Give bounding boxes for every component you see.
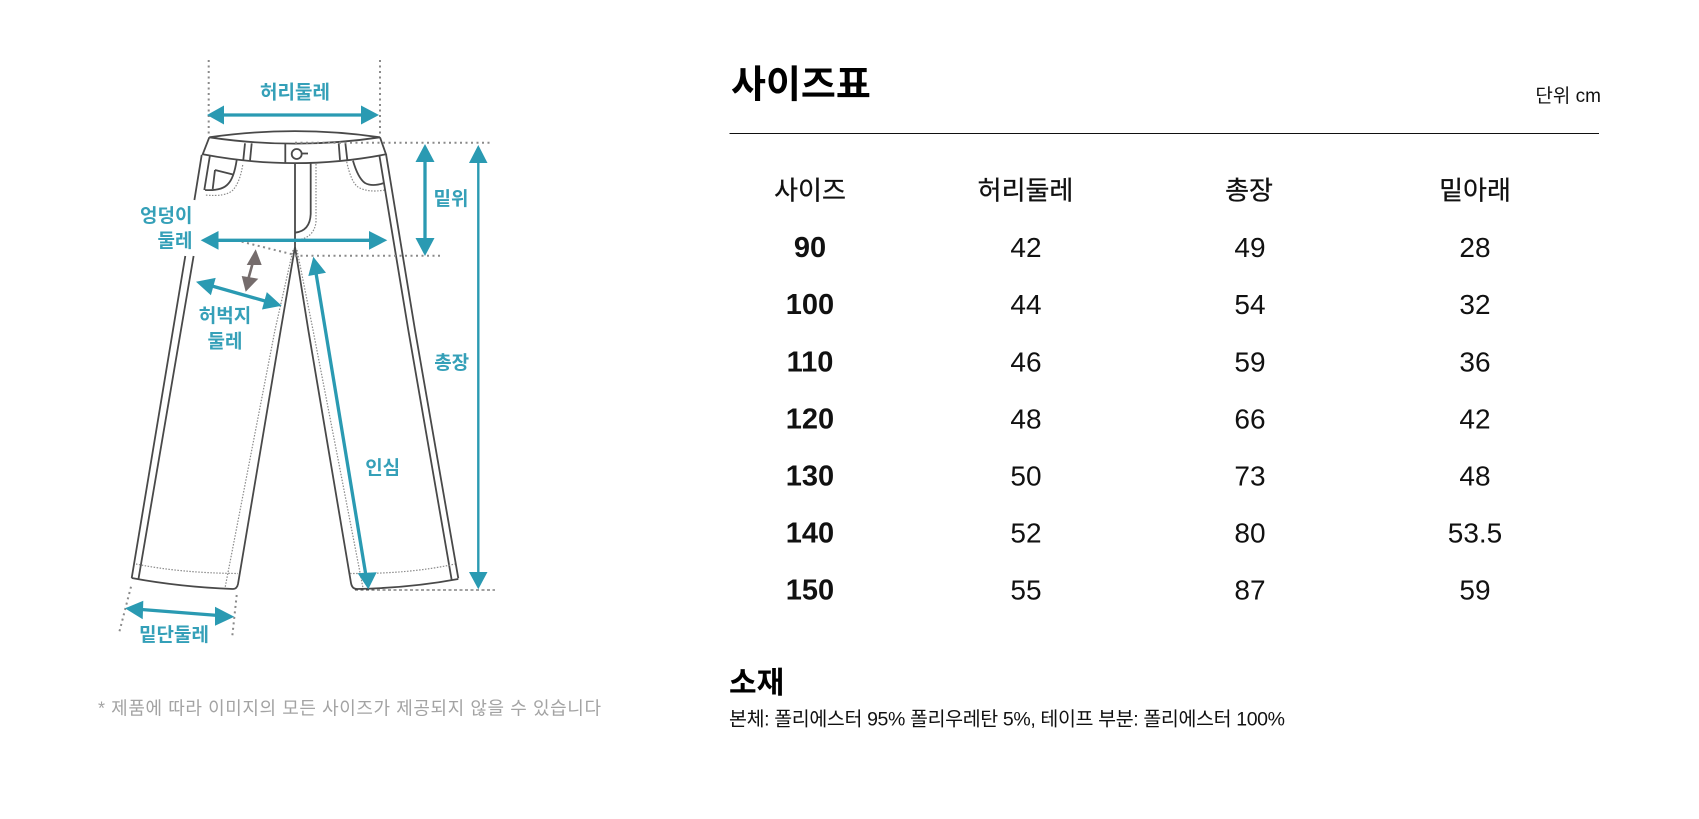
label: hip: 엉덩이	[140, 205, 192, 227]
material description: 본체: 폴리에스터 95% 폴리우레탄 5%, 테이프 부분: 폴리에스터 100%	[729, 708, 1285, 730]
row 150	[786, 574, 1491, 606]
row 110: 46	[1010, 346, 1042, 378]
arrow: inseam	[308, 257, 377, 589]
row 150: 150	[786, 574, 834, 606]
row 90: 90	[794, 232, 826, 264]
row 90: 49	[1234, 232, 1266, 263]
row 110: 110	[787, 346, 833, 378]
label: thigh	[199, 305, 251, 352]
divider	[730, 133, 1599, 134]
icon: pants outline	[132, 131, 458, 589]
row 120: 48	[1010, 404, 1042, 434]
row 120: 66	[1234, 404, 1266, 434]
label: hem: 밑단둘레	[139, 624, 209, 646]
material heading: 소재	[729, 667, 784, 700]
row 120: 42	[1459, 404, 1491, 434]
label: thigh: 허벅지	[199, 305, 251, 327]
row 150: 87	[1234, 574, 1266, 606]
row 100: 100	[786, 289, 834, 321]
row 130: 130	[786, 460, 834, 492]
row 140: 140	[786, 518, 834, 550]
row 110: 36	[1459, 346, 1491, 378]
label: thigh: 둘레	[208, 330, 242, 352]
row 130	[786, 460, 1491, 492]
row 150: 59	[1459, 574, 1491, 606]
row 100: 44	[1010, 289, 1042, 320]
label: rise: 밑위	[434, 188, 468, 210]
label: hip	[140, 205, 192, 252]
table header: 허리둘레	[978, 176, 1073, 206]
row 120	[786, 404, 1491, 436]
table: size chart	[774, 176, 1511, 606]
row 140: 53.5	[1448, 518, 1502, 548]
label: hip: 둘레	[158, 230, 192, 252]
arrow: thigh	[196, 278, 282, 310]
arrow: rise	[416, 144, 434, 256]
arrow: hip	[201, 231, 387, 250]
row 150: 55	[1010, 574, 1042, 606]
row 110: 59	[1234, 346, 1266, 378]
row 140	[786, 518, 1502, 550]
row 110	[787, 346, 1491, 378]
row 100	[786, 289, 1491, 321]
row 90: 42	[1010, 232, 1042, 263]
table header	[774, 176, 1511, 206]
table header: 밑아래	[1439, 176, 1511, 206]
row 130: 48	[1459, 460, 1491, 492]
row 90	[794, 232, 1491, 264]
arrow: hem	[125, 601, 234, 626]
row 90: 28	[1459, 232, 1491, 263]
arrow: total length	[469, 145, 488, 589]
row 140: 80	[1234, 518, 1266, 548]
row 120: 120	[786, 404, 834, 436]
label: waist: 허리둘레	[260, 82, 330, 104]
row 100: 54	[1234, 289, 1266, 320]
note: * 제품에 따라 이미지의 모든 사이즈가 제공되지 않을 수 있습니다	[98, 698, 601, 718]
arrow: thigh position	[242, 249, 262, 292]
guide lines: dotted	[119, 60, 495, 636]
label: total length: 총장	[434, 352, 469, 374]
table header: 총장	[1225, 176, 1273, 206]
row 140: 52	[1010, 518, 1042, 548]
panel: pants diagram	[119, 60, 495, 646]
unit: 단위 cm	[1535, 85, 1601, 107]
title: 사이즈표	[731, 64, 871, 106]
row 130: 50	[1010, 460, 1042, 492]
arrow: waist	[207, 106, 379, 124]
label: inseam: 인심	[365, 457, 400, 479]
table header: 사이즈	[774, 176, 846, 206]
row 100: 32	[1459, 289, 1491, 320]
row 130: 73	[1234, 460, 1266, 492]
